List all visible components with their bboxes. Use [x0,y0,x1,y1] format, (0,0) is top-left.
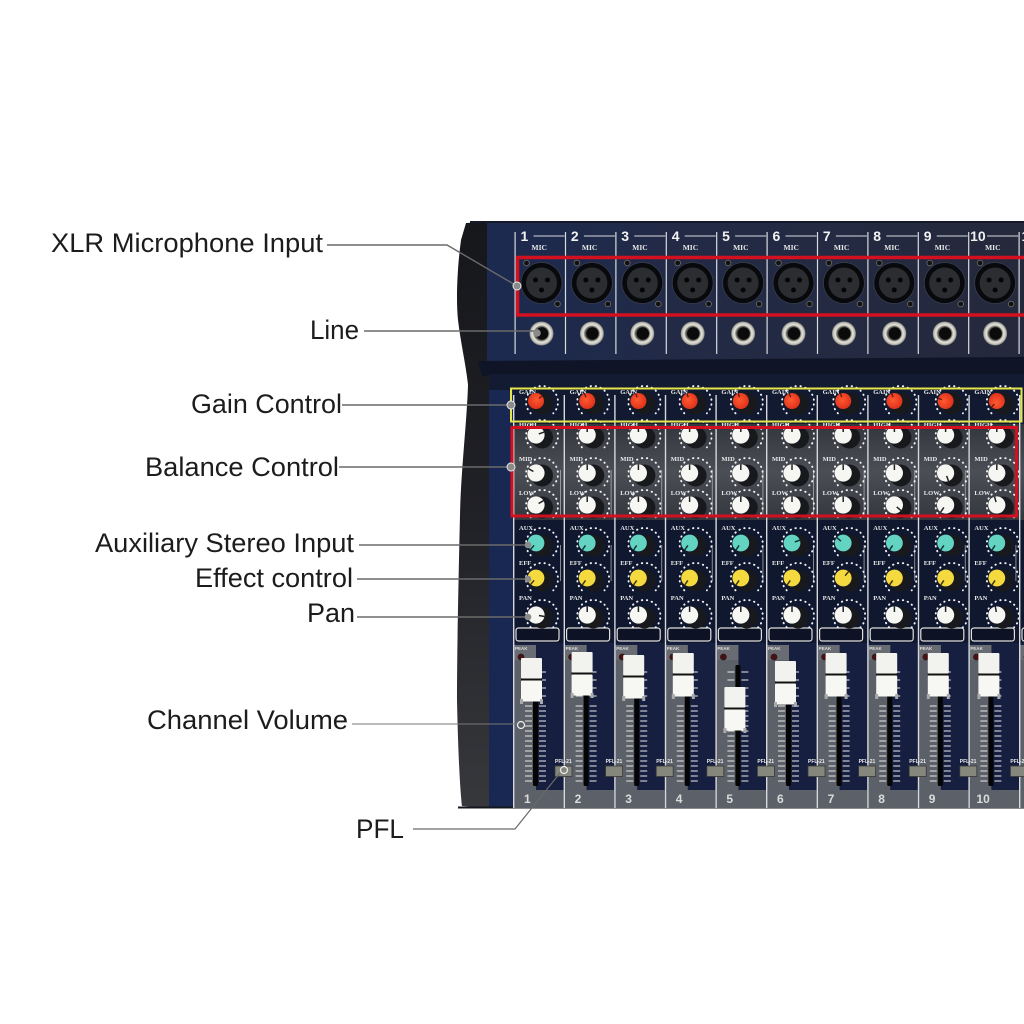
strip 5: GAIN [721,389,739,396]
strip 9: LOW [924,490,940,497]
strip 3: EFF [620,560,633,567]
channel 1 input: MIC [532,243,547,252]
strip 4 [665,386,715,808]
strip 9: PEAK [920,646,933,651]
strip 3: AUX [620,525,635,532]
strip 8: LOW [873,490,890,497]
strip 8: PAN [873,595,886,602]
strip 7: LOW [823,490,839,497]
strip 3: HIGH [620,422,638,429]
strip 6 [766,386,817,808]
strip 4: 4 [676,792,683,806]
strip 2: GAIN [570,389,587,396]
strip 3: LOW [620,490,637,497]
PFL button captions: PFL-21 [656,759,673,765]
callout: Pan [307,598,531,628]
strip 4: MID [671,456,684,463]
mixer console [457,221,1024,808]
strip 6: PAN [772,595,785,602]
strip 1: PEAK [515,646,528,651]
callout: Line: Line [310,315,359,345]
channel 3 input [615,228,665,354]
callout: Effect control [195,563,531,593]
strip 5: PAN [721,595,735,602]
strip 8: AUX [873,525,888,532]
side casing [457,222,490,808]
strip 7: PEAK [819,646,832,651]
strip 2: EFF [570,560,582,567]
strip 2: AUX [570,525,584,532]
strip 10: AUX [974,525,989,532]
callout: Balance Control: Balance Control [145,452,339,482]
channel 5 input [716,228,766,354]
strip 5: LOW [721,490,738,497]
strip 6: GAIN [772,389,789,396]
strip 1 [513,386,564,808]
PFL button captions [555,759,1024,765]
strip 1: 1 [524,792,531,806]
strip 1: GAIN [519,389,536,396]
channel 9 input: 9 [924,228,932,244]
strip 10: MID [974,456,988,463]
channel 9 input [918,228,968,354]
strip 9: PAN [924,595,937,602]
strip 3 [614,386,665,808]
strip 5: MID [721,456,735,463]
strip 5: AUX [721,525,736,532]
strip 4: EFF [671,560,683,567]
strip 4: PEAK [667,646,680,651]
strip 2: MID [570,456,583,463]
PFL button captions: PFL-21 [707,759,724,765]
PFL button captions: PFL-21 [606,759,622,765]
PFL button captions: PFL-21 [909,759,926,765]
strip 5: 5 [726,792,733,806]
strip 4: AUX [671,525,685,532]
channel 8 input: MIC [884,243,900,252]
PFL button captions: PFL-21 [757,759,774,765]
callout: Channel Volume [147,705,524,735]
channel 10 input [968,228,1018,354]
strip 1: LOW [519,490,535,497]
highlight: balance control box [512,428,1016,516]
strip 7: HIGH [823,422,840,429]
channel 2 input: MIC [582,243,597,252]
strip 2: HIGH [570,422,587,429]
strip 7: PAN [823,595,836,602]
highlight: gain control box [511,388,1022,422]
upper band of lower panel [489,374,1024,390]
strip 9 [918,386,968,808]
top input panel [487,222,1024,362]
channel 6 input: MIC [784,243,799,252]
callout: PFL [356,766,568,844]
strip 3: 3 [625,792,632,806]
callout: Pan: Pan [307,598,355,628]
strip 8: PEAK [869,646,882,651]
strip 10: LOW [974,490,991,497]
input columns [514,228,1024,354]
callout: XLR Microphone Input [51,228,521,290]
strip 10: PAN [974,595,988,602]
channel 1 input: 1 [520,228,528,244]
strip 1: MID [519,456,533,463]
channel 7 input: 7 [823,228,831,244]
strip 2: LOW [570,490,586,497]
strip 4: PAN [671,595,684,602]
channel 4 input: 4 [672,228,680,244]
strip 2 [564,386,614,808]
callout: Auxiliary Stereo Input: Auxiliary Stereo Input [95,528,354,558]
strip 5: HIGH [721,422,739,429]
strip 11 partial [1019,388,1024,808]
strip 10: PEAK [970,646,984,651]
strip 9: AUX [924,525,938,532]
strip 8 [867,386,918,808]
channel 6 input: 6 [772,228,780,244]
strip 10: EFF [974,560,987,567]
channel 6 input [766,228,816,354]
strip 8: MID [873,456,887,463]
callout: XLR Microphone Input: XLR Microphone Input [51,228,324,258]
channel 4 input [666,228,716,354]
PFL button captions: PFL-21 [808,759,825,765]
callout: PFL: PFL [356,814,404,844]
strip 3: GAIN [620,389,637,396]
PFL button captions: PFL-21 [960,759,977,765]
callout: Gain Control: Gain Control [191,389,342,419]
strip 1: HIGH [519,422,537,429]
callout: Auxiliary Stereo Input [95,528,531,558]
PFL buttons [555,766,1024,776]
strip 4: LOW [671,490,687,497]
channel 2 input [565,228,615,354]
strip 8: 8 [878,792,885,806]
channel 11 input partial [1018,228,1024,354]
channel 2 input: 2 [571,228,579,244]
strip 7: 7 [828,792,835,806]
strip 8: HIGH [873,422,891,429]
strip 8: EFF [873,560,886,567]
channel 5 input: MIC [733,243,749,252]
strip 6: 6 [777,792,784,806]
strip 3: PEAK [616,646,629,651]
highlight: XLR inputs box [518,258,1024,315]
strip 6: AUX [772,525,786,532]
strip 6: EFF [772,560,784,567]
strip 6: PEAK [768,646,781,651]
PFL button captions: PFL-21 [859,759,875,765]
strip 4: GAIN [671,389,688,396]
channel 8 input [867,228,917,354]
strip 9: GAIN [924,389,941,396]
strip 8: GAIN [873,389,890,396]
strip 5: EFF [721,560,734,567]
channel 1 input [514,228,564,354]
strip 5 [715,386,766,808]
channel 8 input: 8 [873,228,881,244]
strip 9: 9 [929,792,936,806]
strip 6: LOW [772,490,788,497]
panel top edge [470,221,1024,223]
channel 10 input: MIC [985,243,1001,252]
strip 9: EFF [924,560,936,567]
strip 6: HIGH [772,422,790,429]
lower control panel [489,374,1024,808]
strip 3: PAN [620,595,633,602]
callout: Balance Control [145,452,515,482]
panel overhang [478,357,1024,376]
channel 7 input [817,228,867,354]
strip 10: GAIN [974,389,992,396]
channel 3 input: MIC [632,243,648,252]
channel 5 input: 5 [722,228,730,244]
strip 7: AUX [823,525,837,532]
strip 7 [817,386,867,808]
strip 1: AUX [519,525,533,532]
strip 9: MID [924,456,937,463]
bottom edge [458,806,1024,808]
strip 10: HIGH [974,422,992,429]
channel 3 input: 3 [621,228,629,244]
strip 7: EFF [823,560,835,567]
strip 9: HIGH [924,422,942,429]
channel 9 input: MIC [935,243,950,252]
callout: Gain Control [191,389,515,419]
strip 4: HIGH [671,422,689,429]
channel strips [513,386,1024,808]
strip 1: EFF [519,560,531,567]
left navy trim [489,390,513,808]
strip 1: PAN [519,595,532,602]
strip 5: PEAK [717,646,731,651]
channel 10 input: 10 [970,228,986,244]
strip 7: GAIN [823,389,840,396]
channel 4 input: MIC [683,243,698,252]
strip 2: PAN [570,595,583,602]
callout: Effect control: Effect control [195,563,353,593]
strip 2: PEAK [566,646,579,651]
channel 7 input: MIC [834,243,849,252]
callout: Channel Volume: Channel Volume [147,705,348,735]
strip 3: MID [620,456,634,463]
strip 6: MID [772,456,786,463]
strip 2: 2 [575,792,582,806]
strip 10 [968,386,1019,808]
callout: Line [310,315,541,345]
strip 10: 10 [976,792,990,806]
PFL button captions: PFL-21 [555,759,572,765]
strip 7: MID [823,456,836,463]
